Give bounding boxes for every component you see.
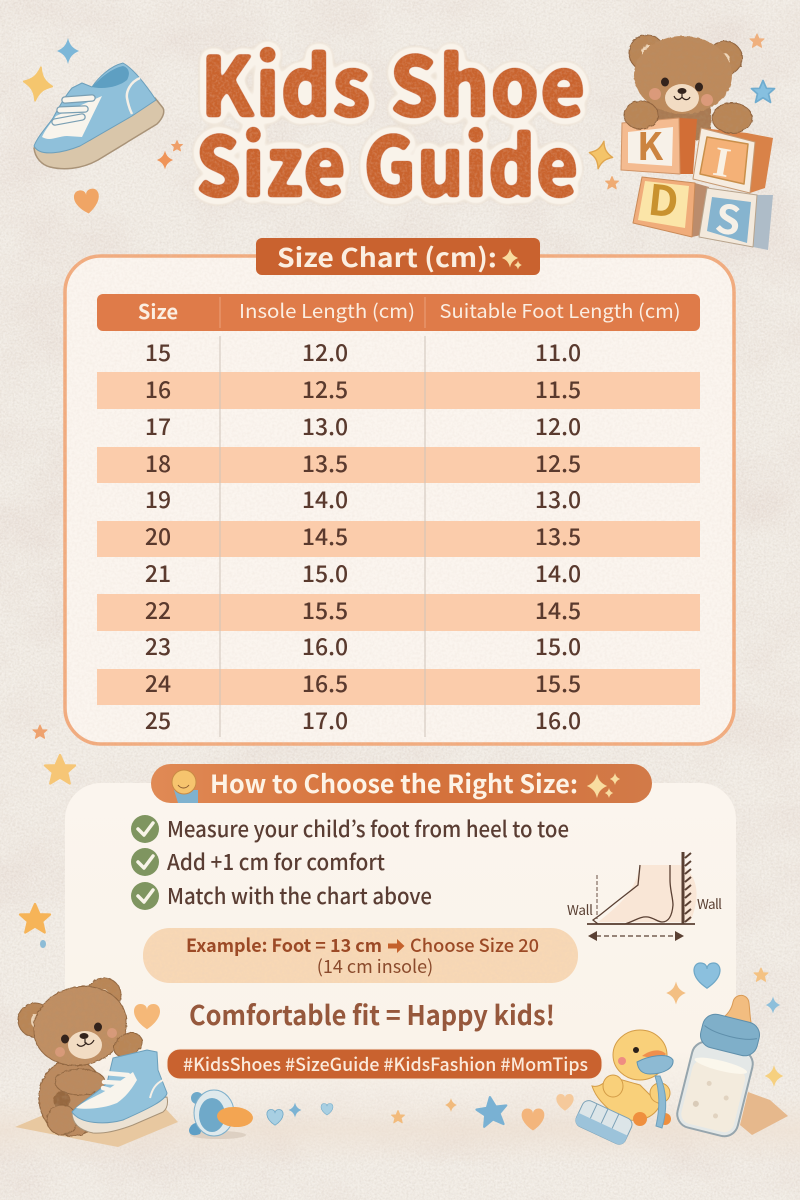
row 17: 17 [145,408,171,442]
icon: sparkle orange right [666,982,686,1004]
panel: size chart [65,256,734,744]
row 15: 15 [145,334,171,368]
illustration: baby bottle [674,995,762,1139]
pacifier in mouth [637,1056,673,1074]
sneaker [72,1050,168,1133]
row 19: 14.0 [302,481,348,515]
hashtags: #KidsShoes #SizeGuide #KidsFashion #MomTips [183,1051,588,1077]
row 22: 22 [145,592,171,626]
heading: size chart: Size Chart (cm): [277,238,497,275]
row 23 [145,628,581,662]
block I [693,128,773,193]
heading: how to choose: How to Choose the Right Size: [210,765,578,801]
block D [633,167,709,237]
row 16: 12.5 [302,371,348,405]
block S: S [712,187,745,247]
row 18 [145,445,581,479]
column dividers [220,336,425,737]
icon: teddy bear top right [629,35,742,140]
icon: sparkle yellow [21,65,55,103]
icon: star orange right [754,968,768,981]
icon: sparkle blue [57,38,79,64]
row 18: 18 [145,445,171,479]
icon: blue heart small [267,1110,283,1125]
teddy [18,976,146,1136]
block K: K [637,116,664,171]
icon: heart beside tagline [134,1004,160,1029]
icon: sparkle yellow right [586,139,616,171]
icon: star small orange right [606,176,618,189]
row 22: 14.5 [535,592,581,626]
icon: star orange top [750,34,764,47]
row 20: 14.5 [302,518,348,552]
icon: star left lower [20,904,50,932]
panel: how to choose [65,783,736,1118]
bottle collar [698,1011,762,1059]
icon: heart top left [73,188,101,215]
callout: example: Example: Foot = 13 cm [186,932,382,958]
arrow [388,939,404,953]
illustration: teddy with sneaker [15,976,178,1147]
row 18: 12.5 [535,445,581,479]
block D: D [645,167,682,230]
icon: sparkle yellow lower right [765,1065,783,1087]
icon: pale orange heart [556,1094,574,1111]
row 25: 17.0 [302,702,348,736]
icon: orange sparkle small [445,1098,457,1112]
row 23: 16.0 [302,628,348,662]
row 17: 13.0 [302,408,348,442]
row 15 [145,334,581,368]
title [195,21,586,222]
foot shading [598,865,697,922]
row 18: 13.5 [302,445,348,479]
foot outline [593,865,673,924]
icon: alphabet blocks [621,116,773,250]
row 21: 21 [145,555,171,589]
row 24 [145,665,581,699]
icon: droplet [40,940,46,948]
icon: sparkle blue right [766,996,780,1014]
row 21: 15.0 [302,555,348,589]
measure arrow [596,935,676,937]
row 22 [145,592,581,626]
row 20: 20 [145,518,171,552]
icon: orange heart [522,1108,544,1131]
icon: star left large [45,755,75,784]
row 21: 14.0 [535,555,581,589]
diagram: foot measurement [567,852,722,941]
row 17 [145,408,581,442]
block K [621,116,697,174]
icon: teddy bear front top right [624,78,752,133]
row 20: 13.5 [535,518,581,552]
icon: brown block behind bottle [740,1092,788,1135]
row 16: 11.5 [535,371,581,405]
icon: star left small [33,725,47,738]
row 19: 13.0 [535,481,581,515]
diagram: foot measurement: Wall [697,893,722,913]
icon: orange star small [392,1110,404,1123]
icon: blue sneaker [34,63,164,169]
icon: blue star [475,1095,509,1127]
title: Kids Shoe [200,21,586,142]
icon: blue sparkle small [289,1102,301,1118]
table header: Suitable Foot Length (cm) [440,297,680,324]
icon: sparkle orange large [157,150,173,170]
table striped rows [97,372,700,705]
icon: sparkle orange small [172,140,182,151]
block S [699,187,773,250]
wall [682,852,684,924]
face [649,78,713,112]
icon: pacifier [189,1090,254,1139]
icon: blue heart right [694,963,720,988]
floor wash [0,1095,800,1165]
diagram: foot measurement: Wall [567,899,593,919]
row 20 [145,518,581,552]
title: Size Guide [195,101,579,222]
table header: Insole Length (cm) [239,297,415,324]
callout: example [143,928,578,983]
row 21 [145,555,581,589]
row 23: 15.0 [535,628,581,662]
row 23: 23 [145,628,171,662]
callout: example: (14 cm insole) [317,953,433,979]
callout: example: Choose Size 20 [410,932,539,958]
icon: baby face [172,770,198,803]
illustration: rubber duck [592,1030,673,1128]
teddy face [55,1022,117,1059]
icon: blue heart tiny [321,1104,333,1115]
tagline: Comfortable fit = Happy kids! [189,994,555,1033]
icon: star blue top [752,80,774,102]
floor mat [15,1108,178,1147]
row 24: 16.5 [302,665,348,699]
check 2: Add +1 cm for comfort [167,845,385,877]
table header [97,294,700,331]
row 16: 16 [145,371,171,405]
check 3: Match with the chart above [167,879,432,911]
heading: how to choose [151,764,652,803]
row 25: 25 [145,702,171,736]
row 22: 15.5 [302,592,348,626]
checklist [131,812,569,911]
row 16 [145,371,581,405]
row 17: 12.0 [535,408,581,442]
icon: small blue block [574,1098,634,1147]
paws [624,101,752,133]
check 1: Measure your child’s foot from heel to toe [167,812,569,844]
row 15: 11.0 [535,334,581,368]
row 25: 16.0 [535,702,581,736]
bottle nipple [720,995,752,1027]
row 15: 12.0 [302,334,348,368]
table header: Size [138,296,178,325]
row 19: 19 [145,481,171,515]
row 24: 24 [145,665,171,699]
row 24: 15.5 [535,665,581,699]
block I: I [710,139,734,187]
row 19 [145,481,581,515]
row 25 [145,702,581,736]
